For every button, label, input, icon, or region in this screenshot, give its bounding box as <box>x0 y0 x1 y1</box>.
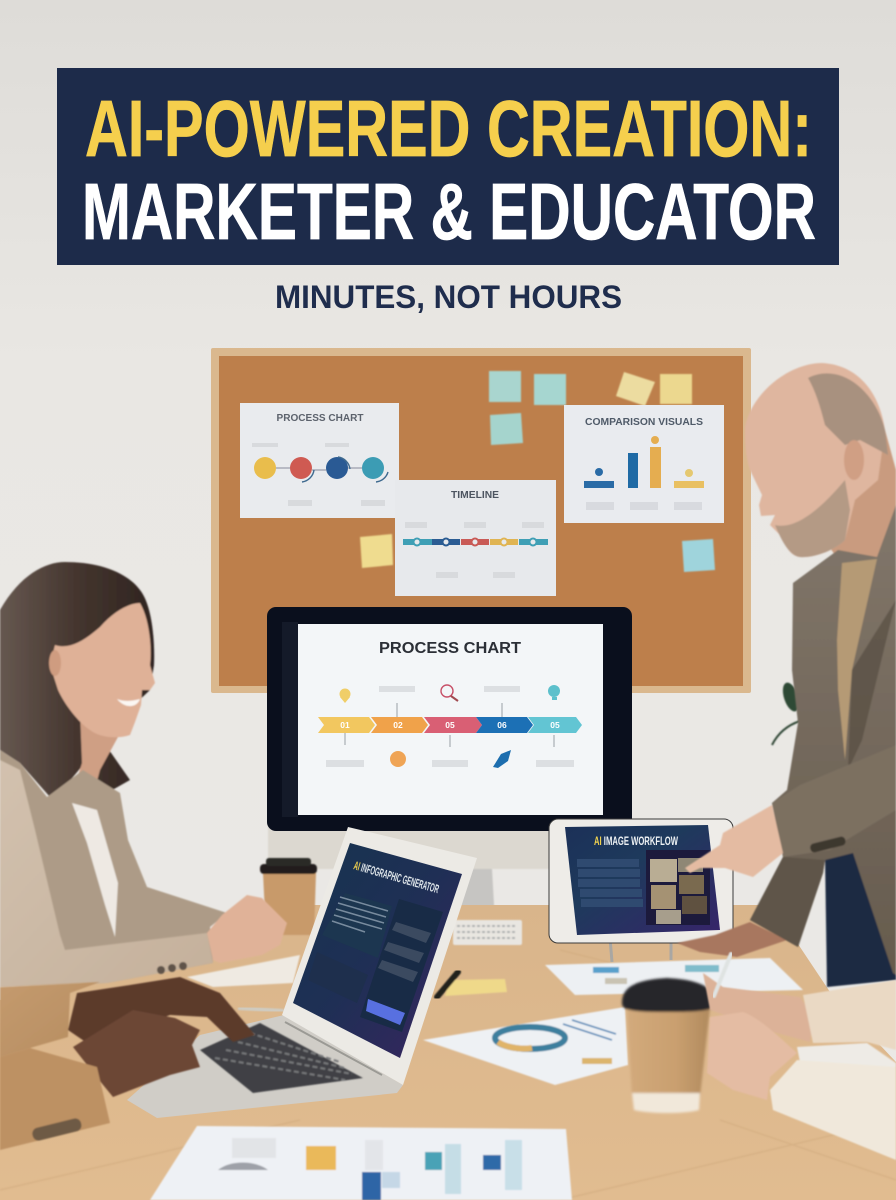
tablet heading: AI IMAGE WORKFLOW <box>594 834 678 848</box>
lower sleeve <box>770 1060 896 1160</box>
man at laptop: arm and hand <box>0 977 255 1150</box>
tablet workflow rows <box>577 859 643 907</box>
laptop <box>127 827 477 1118</box>
woman face <box>50 603 155 737</box>
laptop lid <box>282 827 477 1085</box>
woman shirt <box>72 803 118 937</box>
woman left arm <box>0 760 213 987</box>
tablet image grid <box>646 850 710 925</box>
laptop screen <box>293 843 462 1058</box>
woman neck <box>72 712 118 800</box>
coffee cup: front <box>622 978 715 1113</box>
chevron process: 02 <box>393 720 403 730</box>
woman smile <box>117 699 140 706</box>
paper: foreground bar chart document <box>150 1126 572 1200</box>
paper under sleeve <box>797 1043 896 1075</box>
chevron process: 05 <box>445 720 455 730</box>
man lower sleeve <box>750 857 825 947</box>
hand back <box>68 977 255 1045</box>
title banner <box>57 68 839 265</box>
woman hands <box>207 895 287 963</box>
man resting hand <box>677 922 787 957</box>
sleeve lower <box>0 1048 110 1150</box>
laptop hinge <box>285 1022 382 1075</box>
seated person at right: hands and sleeves <box>703 973 896 1160</box>
tablet on stand <box>549 819 733 962</box>
woman at laptop <box>0 562 300 987</box>
coffee cup: back <box>260 858 317 935</box>
man stubble <box>775 480 850 557</box>
sleeve buttons <box>157 962 187 974</box>
keyboard <box>453 920 522 945</box>
laptop text panel <box>322 893 392 958</box>
monitor <box>267 607 632 922</box>
subtitle: MINUTES, NOT HOURS <box>275 279 622 315</box>
laptop settings panel <box>360 899 443 1032</box>
sleeve upper <box>0 982 100 1057</box>
woman hair <box>0 562 154 797</box>
man lapel shadow <box>848 600 896 770</box>
man shirt <box>837 559 877 760</box>
monitor chin and stand <box>268 825 632 922</box>
laptop keyboard <box>200 1023 363 1093</box>
man neck <box>815 430 896 565</box>
pen in hand <box>714 954 731 996</box>
sleeve buttons <box>31 1117 83 1142</box>
paper: table document with charts <box>545 958 803 995</box>
sticky pad and pen <box>437 972 507 997</box>
laptop stand bar <box>238 1008 284 1011</box>
sticky notes <box>360 371 715 572</box>
laptop screen heading: AI INFOGRAPHIC GENERATOR <box>352 858 441 896</box>
man trousers <box>825 850 896 987</box>
cork board <box>211 348 751 693</box>
chart icons <box>340 685 560 768</box>
small labels <box>326 686 574 767</box>
man ear <box>844 440 864 480</box>
laptop prompt panel <box>308 952 368 1003</box>
chevron process: 01 <box>340 720 350 730</box>
notebook <box>187 955 300 987</box>
paper: donut chart document <box>423 1007 628 1085</box>
chevron process <box>318 717 582 733</box>
man jacket <box>750 505 896 975</box>
plant behind man <box>772 681 802 745</box>
cuff buttons <box>809 836 846 853</box>
man pointing hand <box>685 805 783 877</box>
paper heading: TIMELINE <box>451 490 499 501</box>
table <box>0 905 896 1200</box>
man presenting <box>677 363 896 987</box>
paper heading: PROCESS CHART <box>276 413 364 424</box>
lower hand <box>707 1012 797 1100</box>
paper: comparison visuals <box>564 405 724 523</box>
paper: timeline <box>395 480 556 596</box>
upper hand <box>703 973 813 1042</box>
chevron process: 06 <box>497 720 507 730</box>
laptop base <box>127 1015 403 1118</box>
paper heading: COMPARISON VISUALS <box>585 417 703 428</box>
upper sleeve <box>803 980 896 1050</box>
woman ear <box>49 650 61 676</box>
hand front <box>73 1010 200 1097</box>
chevron process: 05 <box>550 720 560 730</box>
man forearm cuff <box>772 745 896 857</box>
laptop generate button <box>366 999 405 1025</box>
man head <box>745 363 885 557</box>
monitor heading: PROCESS CHART <box>379 640 521 657</box>
woman blazer <box>0 750 227 987</box>
paper: process chart <box>240 403 399 518</box>
man cropped hair <box>808 373 888 455</box>
